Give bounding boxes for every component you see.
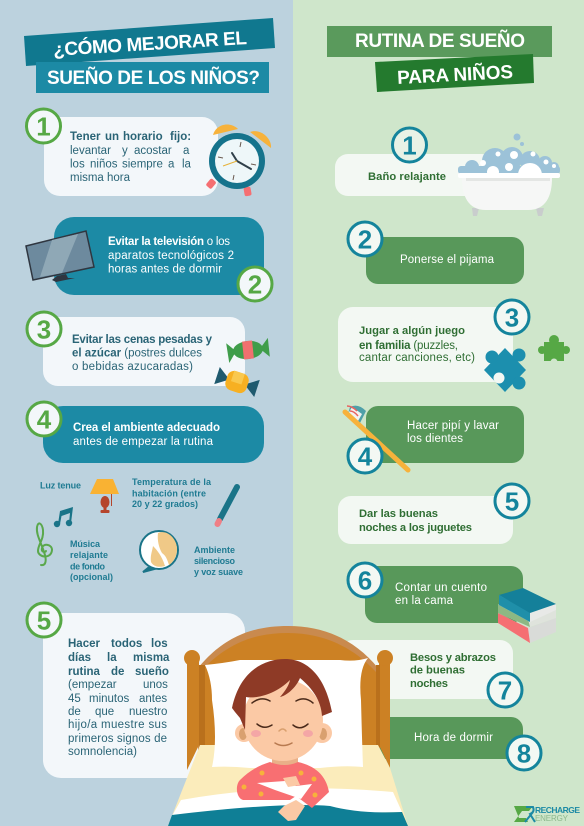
routine 5 card: juguetes: Dar las buenas (359, 508, 438, 520)
step 5 card: misma rutina: días (68, 652, 91, 664)
routine 7 card: besos: noches (410, 678, 448, 690)
routine 4 card: pipí y dientes (366, 406, 524, 463)
routine 7 card: besos: de buenas (410, 664, 465, 676)
icon: candies (214, 338, 270, 398)
step 4 card: ambiente: antes de empezar la rutina (73, 436, 214, 448)
number 4 right: 4 (358, 442, 373, 472)
step 1 card: horario fijo: horario (123, 131, 163, 143)
step 5 card: misma rutina: unos (143, 679, 168, 691)
step 5 card: misma rutina: hijo/a muestre sus (68, 719, 167, 731)
step 5 card: misma rutina (43, 613, 245, 778)
lower hand (278, 800, 305, 821)
neck (272, 755, 298, 769)
routine 6 card: cuento: en la cama (395, 595, 454, 607)
routine 4 card: pipí y dientes: los dientes (407, 433, 463, 445)
routine 1 card: baño (335, 154, 495, 196)
icon: toothbrush (345, 406, 408, 470)
icon: speech bubble (140, 531, 178, 572)
facial features (251, 699, 313, 746)
step 5 card: misma rutina: nuestro (129, 706, 167, 718)
step 2 card: televisión: Evitar la televisión o los (108, 236, 230, 248)
label: temperatura: Temperatura de la (132, 477, 212, 487)
routine 3 card: juego: en familia (puzzles, (359, 340, 458, 352)
step 5 card: misma rutina: de (68, 706, 81, 718)
step 5 card: misma rutina: primeros signos de (68, 733, 167, 745)
routine 6 card: cuento (365, 566, 523, 623)
number 2 right (348, 222, 382, 256)
pillow (205, 658, 368, 768)
number 7 right: 7 (498, 676, 512, 706)
step 1 card: horario fijo: la (182, 158, 192, 170)
step 1 card: horario fijo: un (105, 131, 119, 143)
step 1 card: horario fijo: a (183, 145, 190, 157)
icon: green puzzle piece (538, 335, 570, 366)
headboard (184, 626, 393, 770)
number 4 left: 4 (37, 404, 52, 434)
label: música (70, 539, 113, 582)
label: música: (opcional) (70, 572, 113, 582)
icon: television (26, 231, 94, 282)
left title: ¿CÓMO MEJORAR EL (53, 27, 248, 61)
step 1 card: horario fijo: los (70, 158, 85, 170)
label: ambiente: Ambiente (194, 545, 235, 555)
step 5 card: misma rutina: sueño (135, 666, 169, 678)
number 1 right: 1 (402, 130, 417, 160)
step 1 card: horario fijo: siempre (122, 158, 163, 170)
icon: lamp (90, 479, 119, 513)
logo: Recharge Energy: ENERGY (535, 814, 569, 823)
step 2 card: televisión: aparatos tecnológicos 2 (108, 250, 234, 262)
routine 2 card: pijama (366, 237, 524, 284)
face (243, 679, 323, 761)
routine 3 card: juego (338, 307, 513, 382)
right title: PARA NIÑOS (397, 61, 514, 89)
number 6 right (348, 563, 382, 597)
step 5 card: misma rutina: Hacer (68, 638, 100, 650)
number 2 right: 2 (358, 224, 372, 254)
icon: thermometer (218, 487, 237, 524)
step 5 card: misma rutina: que (95, 706, 114, 718)
number 7 right (488, 673, 522, 707)
step 5 card: misma rutina: la (107, 652, 117, 664)
step 5 card: misma rutina: todos (111, 638, 142, 650)
hair (232, 659, 332, 730)
step 5 card: misma rutina: los (151, 638, 168, 650)
number 5 left (27, 603, 61, 637)
left title: SUEÑO DE LOS NIÑOS? (47, 67, 260, 89)
step 1 card: horario fijo: misma hora (70, 172, 131, 184)
right background panel (293, 0, 584, 826)
step 1 card: horario fijo (44, 117, 218, 196)
routine 1 card: baño: Baño relajante (368, 171, 446, 183)
number 3 right (495, 300, 529, 334)
step 5 card: misma rutina: 45 (68, 693, 81, 705)
left background panel (0, 0, 293, 826)
label: temperatura: habitación (entre (132, 488, 206, 498)
step 5 card: misma rutina: somnolencia) (68, 746, 137, 758)
step 3 card: cenas: el azúcar (postres dulces (72, 348, 202, 360)
step 4 card: ambiente: Crea el ambiente adecuado (73, 422, 220, 434)
label: temperatura (132, 477, 212, 509)
illustration: sleeping child in bed (168, 626, 408, 826)
logo: Recharge Energy (514, 805, 580, 823)
step 5 card: misma rutina: minutos (89, 693, 130, 705)
number 1 left: 1 (36, 112, 51, 142)
label: temperatura: 20 y 22 grados) (132, 499, 198, 509)
step 5 card: misma rutina: misma (133, 652, 170, 664)
mattress and sheets (168, 745, 408, 826)
number 3 left (27, 312, 61, 346)
number 4 right (348, 439, 382, 473)
step 5 card: misma rutina: de (111, 666, 124, 678)
routine 3 card: juego: Jugar a algún juego (359, 325, 465, 337)
label: ambiente: y voz suave (194, 567, 243, 577)
step 1 card: horario fijo: y (122, 145, 128, 157)
pajama top (237, 762, 329, 808)
step 4 card: ambiente (43, 406, 264, 463)
routine 7 card: besos: Besos y abrazos (410, 652, 496, 664)
label: ambiente (194, 545, 243, 577)
icon: music notes (54, 507, 73, 527)
step 1 card: horario fijo: niños (90, 158, 118, 170)
routine 6 card: cuento: Contar un cuento (395, 582, 487, 594)
step 2 card: televisión (54, 217, 264, 295)
number 6 right: 6 (358, 566, 372, 596)
number 3 right: 3 (505, 302, 519, 332)
routine 8 card: hora de dormir (370, 717, 523, 759)
number 2 left: 2 (248, 270, 262, 300)
step 5 card: misma rutina: antes (139, 693, 167, 705)
right title (327, 26, 552, 92)
left title (24, 18, 275, 93)
routine 7 card: besos (340, 640, 513, 699)
step 1 card: horario fijo: a (168, 158, 175, 170)
label: luz tenue: Luz tenue (40, 480, 81, 490)
number 1 left (26, 109, 60, 143)
upper hand (283, 776, 300, 787)
step 1 card: horario fijo: levantar (70, 145, 111, 157)
number 8 right (507, 736, 541, 770)
step 3 card: cenas: o bebidas azucaradas) (72, 361, 193, 373)
icon: alarm clock (205, 124, 271, 196)
label: música: Música (70, 539, 101, 549)
number 2 left (238, 267, 272, 301)
routine 5 card: juguetes: noches a los juguetes (359, 522, 472, 534)
logo: Recharge Energy: RECHARGE (535, 805, 580, 815)
icon: bathtub (458, 134, 560, 216)
number 4 left (27, 402, 61, 436)
step 1 card: horario fijo: acostar (134, 145, 172, 157)
icon: treble clef (37, 523, 52, 565)
step 5 card: misma rutina: (empezar (68, 679, 117, 691)
number 5 left: 5 (37, 606, 51, 636)
number 1 right (392, 128, 426, 162)
number 8 right: 8 (517, 738, 531, 768)
label: ambiente: silencioso (194, 556, 236, 566)
number 5 right (495, 484, 529, 518)
number 5 right: 5 (505, 486, 519, 516)
step 1 card: horario fijo: Tener (70, 131, 101, 143)
routine 5 card: juguetes (338, 496, 513, 544)
label: música: de fondo (70, 562, 106, 572)
step 3 card: cenas: Evitar las cenas pesadas y (72, 334, 213, 346)
label: música: relajante (70, 550, 108, 560)
icon: stack of books (498, 588, 556, 643)
ears (235, 723, 332, 743)
routine 3 card: juego: cantar canciones, etc) (359, 352, 475, 364)
icon: blue puzzle piece (484, 348, 526, 392)
step 2 card: televisión: horas antes de dormir (108, 264, 222, 276)
step 5 card: misma rutina: rutina (68, 666, 101, 678)
routine 8 card: hora de dormir: Hora de dormir (414, 732, 493, 744)
routine 2 card: pijama: Ponerse el pijama (400, 254, 495, 266)
routine 4 card: pipí y dientes: Hacer pipí y lavar (407, 420, 499, 432)
step 1 card: horario fijo: fijo: (170, 131, 191, 143)
right title: RUTINA DE SUEÑO (355, 30, 525, 52)
number 3 left: 3 (37, 314, 51, 344)
step 3 card: cenas (43, 317, 245, 386)
